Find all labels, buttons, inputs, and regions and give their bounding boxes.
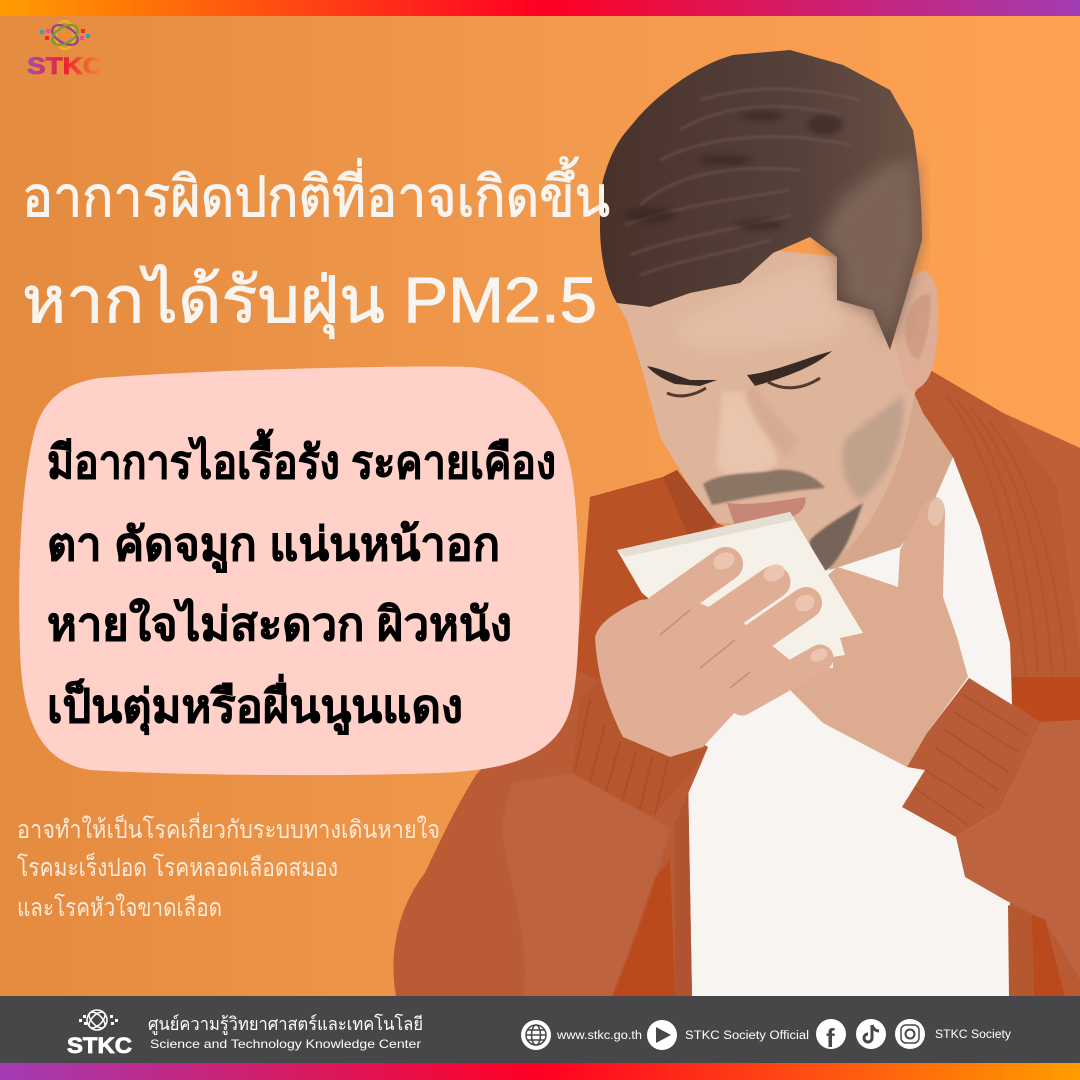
left sleeve xyxy=(394,670,708,996)
symptom text: หายใจไม่สะดวก ผิวหนัง xyxy=(47,597,512,650)
symptom text: เป็นตุ่มหรือผื่นนูนแดง xyxy=(47,674,463,735)
forehead highlight xyxy=(686,272,836,342)
ear xyxy=(892,270,938,390)
back hand xyxy=(790,497,968,767)
tissue shadow fold xyxy=(617,512,794,557)
icon: video play xyxy=(647,1020,677,1050)
left placket xyxy=(675,777,692,996)
right cuff xyxy=(902,678,1040,837)
symptom text: ตา คัดจมูก แน่นหน้าอก xyxy=(47,518,500,573)
icon: globe xyxy=(521,1020,551,1050)
text block: related diseases: โรคมะเร็งปอด โรคหลอดเลือดสมอง xyxy=(17,852,338,882)
title: หากได้รับฝุ่น PM2.5 xyxy=(22,264,597,339)
icon: atom xyxy=(49,21,81,49)
shoulder rib shadow xyxy=(663,470,717,540)
nose xyxy=(717,392,778,478)
right dark strip xyxy=(1032,915,1065,996)
top gradient bar xyxy=(0,0,1080,16)
footer logo: STKC: STKC xyxy=(67,1033,132,1058)
collar ribs xyxy=(945,395,1066,675)
text block: related diseases xyxy=(17,812,440,922)
footer organisation name xyxy=(148,1013,423,1051)
icon: instagram xyxy=(895,1019,925,1049)
footer panel xyxy=(0,996,1080,1063)
tissue xyxy=(617,512,863,673)
left inner dark strip xyxy=(612,860,675,996)
goatee xyxy=(810,503,863,570)
thumb nail xyxy=(928,498,944,526)
logo: STKC top left xyxy=(27,21,103,80)
hair streaks xyxy=(625,89,860,275)
left sleeve front xyxy=(503,773,670,996)
icon: tiktok xyxy=(856,1019,886,1049)
mouth xyxy=(727,497,806,526)
icon: facebook xyxy=(816,1019,846,1053)
left cuff ribs xyxy=(575,700,668,815)
photo: man coughing into tissue xyxy=(394,50,1080,996)
closed eye left xyxy=(667,388,706,396)
eyebrow right xyxy=(747,351,832,386)
icon: facebook: f xyxy=(826,1023,835,1053)
video channel label: STKC Society Official xyxy=(685,1030,809,1042)
footer organisation name: ศูนย์ความรู้วิทยาศาสตร์และเทคโนโลยี xyxy=(148,1013,423,1035)
front hand palm xyxy=(595,595,790,757)
cheek stubble xyxy=(842,395,904,500)
hair xyxy=(600,50,922,350)
text block: related diseases: และโรคหัวใจขาดเลือด xyxy=(17,893,222,922)
cardigan base xyxy=(394,370,1080,996)
faded hair side xyxy=(820,160,920,340)
face xyxy=(617,250,915,567)
website label: www.stkc.go.th xyxy=(556,1030,642,1042)
right placket xyxy=(1008,905,1010,995)
left shoulder xyxy=(575,470,717,690)
footer logo: STKC xyxy=(67,1009,132,1058)
right cuff ribs xyxy=(915,695,1028,825)
left cuff xyxy=(572,747,708,817)
front hand fingers xyxy=(650,564,820,702)
symptom text xyxy=(47,428,556,735)
dark lower band xyxy=(1012,677,1080,722)
moustache xyxy=(703,470,825,505)
finger nails xyxy=(711,549,830,664)
right shoulder xyxy=(1004,413,1080,448)
eyebrow left xyxy=(647,366,717,386)
title: อาการผิดปกติที่อาจเกิดขึ้น xyxy=(22,157,610,228)
bottom gradient bar xyxy=(0,1063,1080,1080)
white shirt xyxy=(688,457,1012,996)
right sleeve xyxy=(956,720,1080,980)
logo: STKC top left: STKC xyxy=(27,53,103,80)
text block: related diseases: อาจทำให้เป็นโรคเกี่ยวกับระบบทางเดินหายใจ xyxy=(17,812,440,844)
neck xyxy=(829,395,953,570)
closed eye right xyxy=(768,378,820,388)
inner ear xyxy=(905,294,930,360)
social label: STKC Society xyxy=(935,1029,1011,1041)
nose shadow xyxy=(746,384,794,451)
right collar band xyxy=(915,371,1003,413)
panel: pink symptom bubble xyxy=(19,367,579,775)
footer organisation name: Science and Technology Knowledge Center xyxy=(150,1037,421,1051)
symptom text: มีอาการไอเรื้อรัง ระคายเคือง xyxy=(47,428,556,488)
title xyxy=(22,157,610,339)
finger gaps xyxy=(660,610,750,688)
hair dark patches xyxy=(625,111,843,230)
